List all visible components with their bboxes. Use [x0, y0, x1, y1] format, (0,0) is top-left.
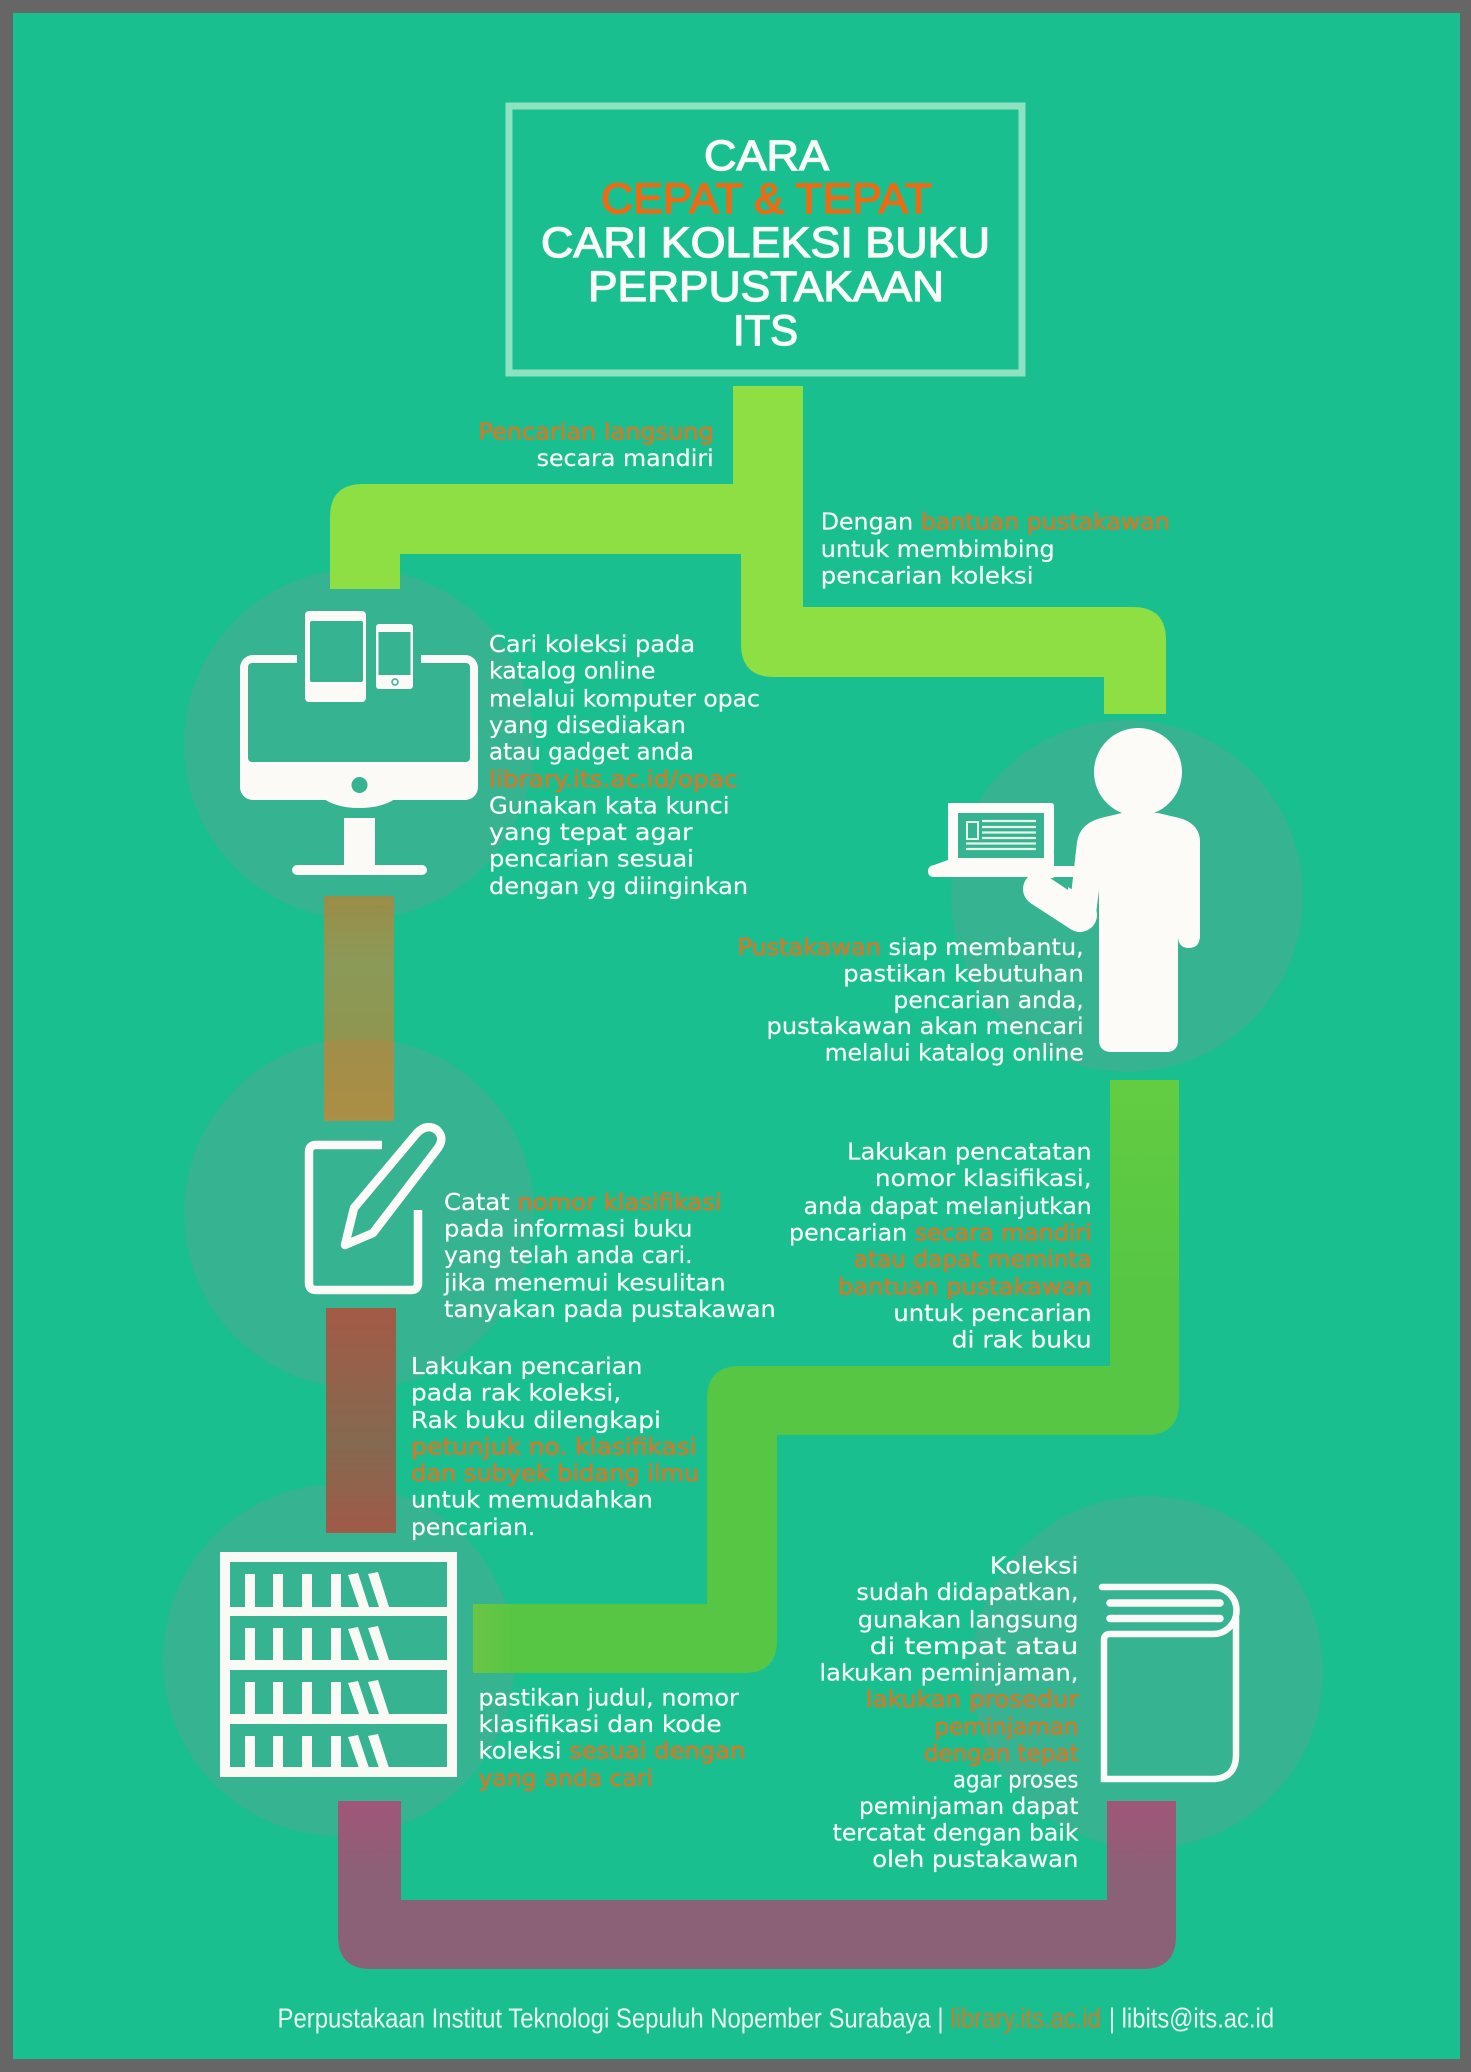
circle: librarian: [951, 720, 1303, 1072]
footer: | libits@its.ac.id: [1109, 2002, 1274, 2033]
text: pencatatan nomor klasifikasi: atau dapat meminta: [854, 1247, 1092, 1273]
text: bantuan pustakawan: pencarian koleksi: [821, 564, 1034, 590]
arrow: upper green path left branch: [330, 386, 803, 589]
icon: note and pencil: [309, 1127, 441, 1290]
text: pastikan judul: yang anda cari: [478, 1766, 653, 1792]
circle: bookshelf: [163, 1484, 515, 1836]
text: pencatatan nomor klasifikasi: nomor klasifikasi,: [875, 1166, 1092, 1192]
title text: CARA: [704, 132, 829, 180]
icon: book: [1102, 1587, 1236, 1779]
text: pencatatan nomor klasifikasi: untuk pencarian: [893, 1301, 1092, 1327]
text: pastikan judul: koleksi sesuai dengan: [478, 1738, 745, 1764]
text: pencatatan nomor klasifikasi: [789, 1140, 1092, 1353]
title text: [541, 132, 990, 355]
text: pastikan judul: pastikan judul, nomor: [478, 1686, 739, 1712]
arrow: lower green path: [473, 1080, 1179, 1673]
text: koleksi sudah didapatkan: tercatat dengan baik: [833, 1820, 1079, 1846]
text: katalog online: katalog online: [489, 659, 656, 685]
text: pencarian pada rak: pada rak koleksi,: [411, 1380, 621, 1406]
text: pastikan judul: klasifikasi dan kode: [478, 1712, 722, 1738]
text: koleksi sudah didapatkan: peminjaman: [934, 1715, 1078, 1741]
text: pencatatan nomor klasifikasi: Lakukan pencatatan: [847, 1140, 1092, 1166]
text: pencarian pada rak: Lakukan pencarian: [411, 1354, 642, 1380]
text: koleksi sudah didapatkan: sudah didapatkan,: [856, 1580, 1078, 1606]
text: pencarian pada rak: untuk memudahkan: [411, 1487, 653, 1513]
text: koleksi sudah didapatkan: peminjaman dapat: [859, 1794, 1078, 1820]
text: catat nomor klasifikasi: jika menemui kesulitan: [443, 1271, 726, 1297]
text: koleksi sudah didapatkan: oleh pustakawan: [872, 1847, 1078, 1873]
text: koleksi sudah didapatkan: dengan tepat: [924, 1741, 1078, 1767]
text: pencatatan nomor klasifikasi: pencarian secara mandiri: [789, 1220, 1092, 1246]
text: katalog online: library.its.ac.id/opac: [489, 767, 737, 793]
text: catat nomor klasifikasi: pada informasi buku: [444, 1216, 693, 1242]
text: pencatatan nomor klasifikasi: bantuan pustakawan: [838, 1275, 1092, 1301]
text: pustakawan siap membantu: [737, 935, 1084, 1067]
text: pencarian pada rak: pencarian.: [411, 1515, 535, 1541]
text: katalog online: pencarian sesuai: [489, 846, 694, 872]
title box: [509, 106, 1022, 373]
icon: librarian with laptop: [928, 728, 1200, 1052]
text: katalog online: yang tepat agar: [489, 820, 693, 846]
text: katalog online: melalui komputer opac: [489, 686, 760, 712]
text: pencarian pada rak: [411, 1354, 699, 1541]
circle: note: [184, 1038, 534, 1388]
text: katalog online: Gunakan kata kunci: [489, 793, 730, 819]
icon: bookshelf: [220, 1552, 457, 1777]
arrow: lower green stub: [473, 1604, 515, 1673]
text: koleksi sudah didapatkan: gunakan langsung: [858, 1608, 1078, 1634]
arrow: brown bar lower: [326, 1308, 396, 1533]
text: pencatatan nomor klasifikasi: anda dapat melanjutkan: [804, 1194, 1092, 1220]
footer: Perpustakaan Institut Teknologi Sepuluh Nopember Surabaya |: [278, 2002, 944, 2033]
text: pencatatan nomor klasifikasi: di rak buku: [952, 1327, 1092, 1353]
text: pustakawan siap membantu: pustakawan akan mencari: [767, 1014, 1084, 1040]
arrow: purple return path: [338, 1801, 1176, 1969]
text: catat nomor klasifikasi: Catat nomor klasifikasi: [444, 1190, 722, 1216]
text: katalog online: atau gadget anda: [489, 739, 694, 765]
title text: CEPAT & TEPAT: [601, 175, 932, 223]
title text: ITS: [733, 307, 798, 355]
text: pustakawan siap membantu: Pustakawan siap membantu,: [737, 935, 1084, 961]
title text: CARI KOLEKSI BUKU: [541, 219, 990, 267]
text: pencarian langsung: secara mandiri: [537, 446, 714, 472]
arrow: brown bar upper: [324, 896, 394, 1121]
text: katalog online: Cari koleksi pada: [489, 632, 695, 658]
text: bantuan pustakawan: untuk membimbing: [821, 537, 1055, 563]
text: catat nomor klasifikasi: yang telah anda cari.: [444, 1243, 693, 1269]
text: koleksi sudah didapatkan: [819, 1553, 1079, 1873]
text: pustakawan siap membantu: pencarian anda,: [893, 988, 1084, 1014]
title text: PERPUSTAKAAN: [588, 263, 944, 311]
text: bantuan pustakawan: Dengan bantuan pustakawan: [821, 509, 1170, 535]
text: katalog online: [489, 632, 760, 900]
text: koleksi sudah didapatkan: lakukan prosedur: [866, 1687, 1079, 1713]
text: koleksi sudah didapatkan: Koleksi: [990, 1553, 1078, 1579]
footer: library.its.ac.id: [950, 2002, 1101, 2033]
text: koleksi sudah didapatkan: agar proses: [953, 1768, 1078, 1794]
text: koleksi sudah didapatkan: lakukan peminjaman,: [819, 1660, 1078, 1686]
text: koleksi sudah didapatkan: di tempat atau: [870, 1634, 1078, 1660]
text: pastikan judul: [478, 1686, 745, 1792]
circle: book: [971, 1496, 1323, 1848]
text: pencarian pada rak: petunjuk no. klasifikasi: [411, 1434, 697, 1460]
text: katalog online: yang disediakan: [489, 713, 686, 739]
text: catat nomor klasifikasi: [443, 1190, 776, 1323]
arrow: upper green path right branch: [741, 540, 1166, 714]
text: pustakawan siap membantu: melalui katalog online: [825, 1041, 1084, 1067]
icon: computer and gadgets: [240, 611, 478, 875]
text: catat nomor klasifikasi: tanyakan pada pustakawan: [444, 1297, 776, 1323]
text: bantuan pustakawan: [821, 509, 1170, 590]
text: katalog online: dengan yg diinginkan: [489, 874, 748, 900]
circle: devices: [184, 569, 534, 919]
text: pencarian pada rak: Rak buku dilengkapi: [411, 1408, 661, 1434]
text: pencarian pada rak: dan subyek bidang ilmu: [411, 1461, 699, 1487]
text: pencarian langsung: [478, 419, 714, 472]
text: pustakawan siap membantu: pastikan kebutuhan: [843, 961, 1084, 987]
text: pencarian langsung: Pencarian langsung: [478, 419, 714, 445]
